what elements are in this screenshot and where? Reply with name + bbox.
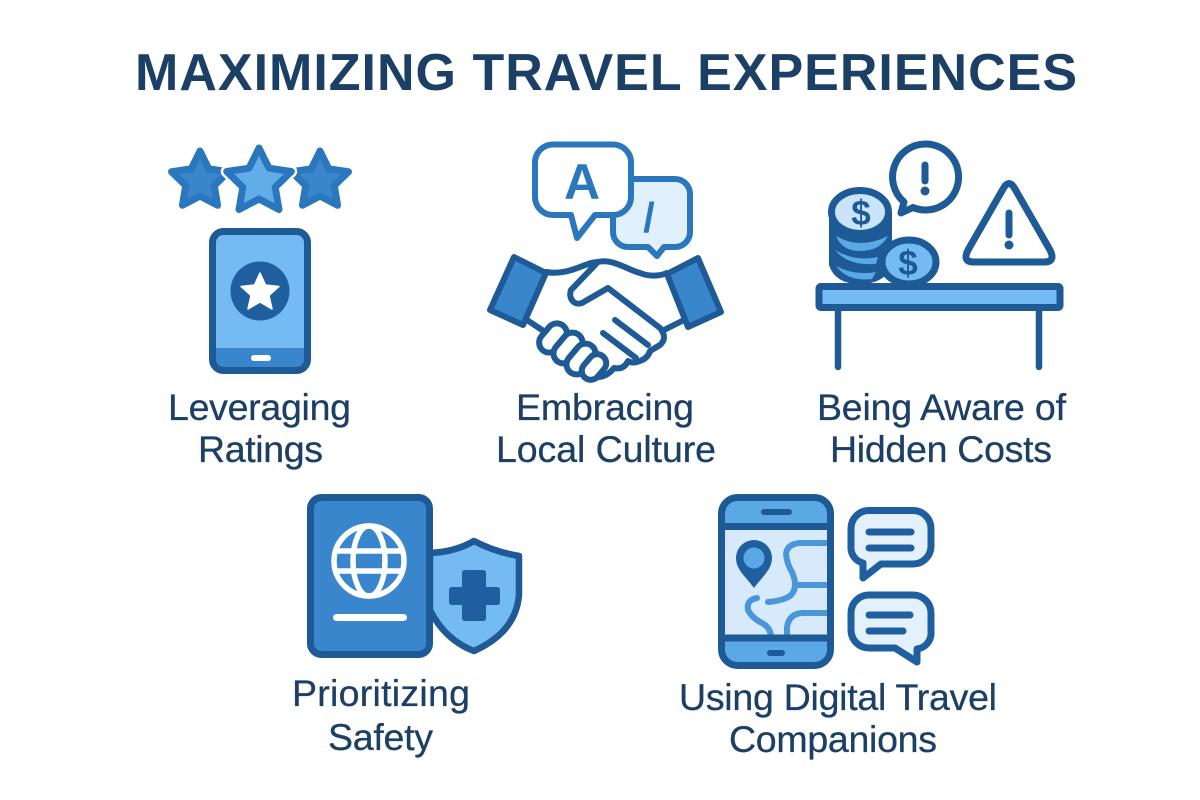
icon: phone with star: [212, 232, 308, 370]
icon: shield with cross: [430, 541, 519, 651]
icon: front coin: $: [898, 244, 918, 283]
icon: coin stack: [829, 190, 892, 284]
icon: phone with map: [722, 498, 830, 666]
icon: passport with globe: [310, 498, 430, 654]
icon: coin stack: $: [851, 194, 871, 233]
label: hidden costs: Hidden Costs: [830, 428, 1052, 470]
icon: speech bubbles: [535, 144, 690, 256]
icon: chat bubble top: [851, 510, 931, 578]
label: digital travel companions: Companions: [729, 718, 937, 760]
label: prioritizing safety: Safety: [328, 716, 433, 758]
icon: warning triangle: [966, 184, 1052, 262]
icon: three stars: [172, 148, 348, 210]
icon: table: [819, 286, 1060, 367]
panel: digital travel companions: [679, 498, 997, 760]
label: prioritizing safety: Prioritizing: [292, 672, 470, 714]
label: embracing local culture: Local Culture: [496, 428, 716, 470]
label: digital travel companions: [679, 676, 997, 760]
icon: speech bubbles: /: [643, 194, 655, 241]
icon: alert speech bubble: [893, 144, 959, 213]
label: leveraging ratings: Ratings: [198, 428, 323, 470]
icon: front coin: [882, 240, 936, 284]
label: embracing local culture: [496, 386, 716, 470]
label: leveraging ratings: Leveraging: [168, 386, 351, 428]
panel: embracing local culture: [490, 144, 721, 470]
label: hidden costs: [817, 386, 1067, 470]
icon: handshake: [490, 257, 721, 384]
panel: prioritizing safety: [292, 498, 519, 758]
icon: speech bubbles: A: [564, 154, 600, 210]
icon: chat bubble bottom: [851, 595, 931, 662]
label: leveraging ratings: [168, 386, 351, 470]
label: digital travel companions: Using Digital Travel: [679, 676, 997, 718]
label: prioritizing safety: [292, 672, 470, 758]
label: hidden costs: Being Aware of: [817, 386, 1067, 428]
label: embracing local culture: Embracing: [516, 386, 694, 428]
panel: leveraging ratings: [168, 148, 351, 470]
title: MAXIMIZING TRAVEL EXPERIENCES: [135, 44, 1077, 102]
panel: hidden costs: [817, 144, 1067, 470]
